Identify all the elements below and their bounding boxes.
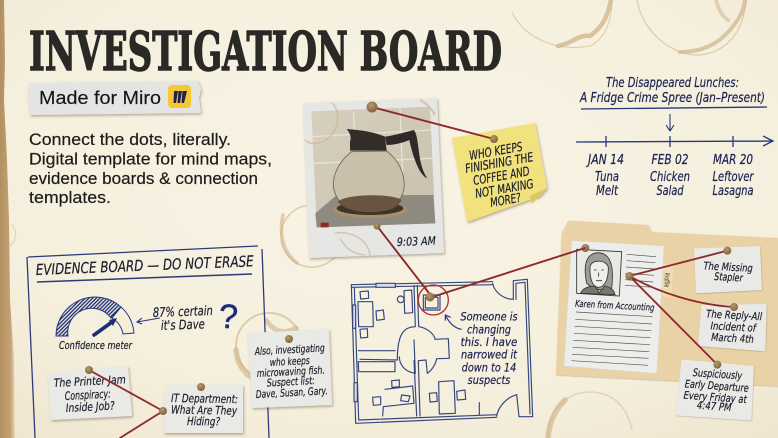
note: early departure: Suspiciously bbox=[692, 366, 743, 382]
profile document bbox=[564, 241, 664, 373]
folder tab: profile: Profile bbox=[663, 273, 671, 287]
sticky note: FINISHING THE bbox=[464, 149, 535, 176]
polaroid photo: 9:03 AM bbox=[397, 234, 436, 249]
photo: coffee carafe bbox=[305, 100, 435, 257]
confidence gauge bbox=[56, 297, 134, 352]
callout: 87% certain bbox=[137, 297, 239, 337]
case file folder bbox=[556, 221, 778, 421]
timeline: disappeared lunches: MAR 20 bbox=[713, 152, 753, 168]
pins: profile bbox=[581, 244, 738, 369]
title: INVESTIGATION BOARD bbox=[29, 21, 502, 83]
portrait: Karen bbox=[577, 249, 622, 296]
timeline: disappeared lunches: Chicken bbox=[650, 169, 690, 185]
note: suspects: this. I have bbox=[461, 335, 517, 349]
sticky note bbox=[452, 123, 547, 222]
timeline: disappeared lunches: Tuna bbox=[595, 169, 619, 185]
pins: main connections bbox=[366, 102, 498, 302]
note: suspects: narrowed it bbox=[461, 348, 517, 362]
polaroid photo bbox=[303, 98, 444, 258]
evidence board heading: EVIDENCE BOARD — DO NOT ERASE bbox=[35, 252, 254, 279]
timeline: disappeared lunches: Salad bbox=[656, 183, 684, 199]
callout: 87% certain: 87% certain bbox=[153, 304, 213, 321]
panel: evidence board bbox=[27, 246, 332, 438]
intro text: templates. bbox=[29, 189, 111, 207]
profile document: Karen from Accounting bbox=[575, 299, 655, 314]
intro text: Digital template for mind maps, bbox=[29, 150, 272, 168]
note: suspects: changing bbox=[467, 322, 511, 336]
sticky note: NOT MAKING bbox=[474, 176, 535, 201]
timeline: disappeared lunches: Leftover bbox=[712, 169, 755, 185]
intro text bbox=[29, 131, 272, 207]
note: printer jam: Inside Job? bbox=[65, 398, 115, 415]
callout: 87% certain: ? bbox=[218, 297, 239, 337]
note: microwaving fish: Also, investigating bbox=[254, 342, 325, 358]
note: IT department: IT Department: bbox=[171, 391, 238, 406]
note: microwaving fish: microwaving fish. bbox=[257, 364, 325, 380]
red string: evidence board bbox=[89, 370, 163, 438]
note: microwaving fish: Suspect list: bbox=[267, 375, 315, 389]
note: missing stapler bbox=[694, 246, 762, 293]
note: suspects: Someone is bbox=[460, 310, 518, 324]
timeline: disappeared lunches: JAN 14 bbox=[586, 152, 624, 168]
note: IT department: Hiding? bbox=[187, 414, 220, 429]
note: suspects: suspects bbox=[468, 373, 510, 387]
note: early departure: Early Departure bbox=[684, 377, 750, 395]
sticky note: WHO KEEPS bbox=[468, 139, 524, 163]
note: missing stapler: The Missing bbox=[703, 259, 753, 275]
note: microwaving fish: Dave, Susan, Gary. bbox=[256, 385, 328, 401]
note: microwaving fish bbox=[248, 329, 332, 408]
timeline: disappeared lunches: Melt bbox=[596, 183, 619, 199]
note: reply-all incident: March 4th bbox=[711, 331, 754, 346]
timeline: disappeared lunches bbox=[576, 75, 773, 199]
note: reply-all incident bbox=[698, 304, 767, 351]
note: early departure: Every Friday at bbox=[683, 389, 748, 406]
callout: 87% certain: it's Dave bbox=[161, 317, 205, 334]
timeline: disappeared lunches: FEB 02 bbox=[652, 152, 688, 168]
tape label: made for miro bbox=[28, 81, 201, 115]
timeline: disappeared lunches: Lasagna bbox=[712, 183, 754, 199]
intro text: evidence boards & connection bbox=[29, 170, 258, 188]
torn left edge bbox=[0, 0, 15, 438]
sticky note: MORE? bbox=[489, 190, 522, 210]
note: suspects bbox=[460, 310, 518, 387]
note: printer jam bbox=[48, 366, 132, 420]
note: reply-all incident: The Reply-All bbox=[706, 307, 762, 323]
note: missing stapler: Stapler bbox=[714, 270, 744, 285]
pins: evidence board bbox=[85, 335, 293, 415]
floor plan bbox=[351, 279, 533, 423]
note: microwaving fish: who keeps bbox=[270, 355, 310, 369]
red strings: main connections bbox=[372, 107, 585, 297]
note: suspects: down to 14 bbox=[462, 360, 516, 374]
note: IT department bbox=[164, 385, 243, 433]
note: printer jam: Conspiracy: bbox=[64, 387, 111, 403]
confidence gauge: Confidence meter bbox=[59, 340, 133, 352]
sticky note: COFFEE AND bbox=[472, 163, 531, 188]
note: IT department: What Are They bbox=[171, 403, 237, 418]
icon: miro logo bbox=[168, 85, 191, 108]
note: printer jam: The Printer Jam bbox=[53, 372, 126, 390]
red strings: profile bbox=[629, 251, 734, 365]
intro text: Connect the dots, literally. bbox=[29, 131, 231, 149]
folder tab: profile bbox=[662, 263, 673, 297]
note: early departure bbox=[676, 359, 754, 421]
note: early departure: 4:47 PM bbox=[696, 399, 732, 414]
evidence board heading bbox=[35, 252, 254, 282]
note: reply-all incident: Incident of bbox=[710, 319, 758, 335]
tape label: made for miro: Made for Miro bbox=[39, 87, 161, 108]
